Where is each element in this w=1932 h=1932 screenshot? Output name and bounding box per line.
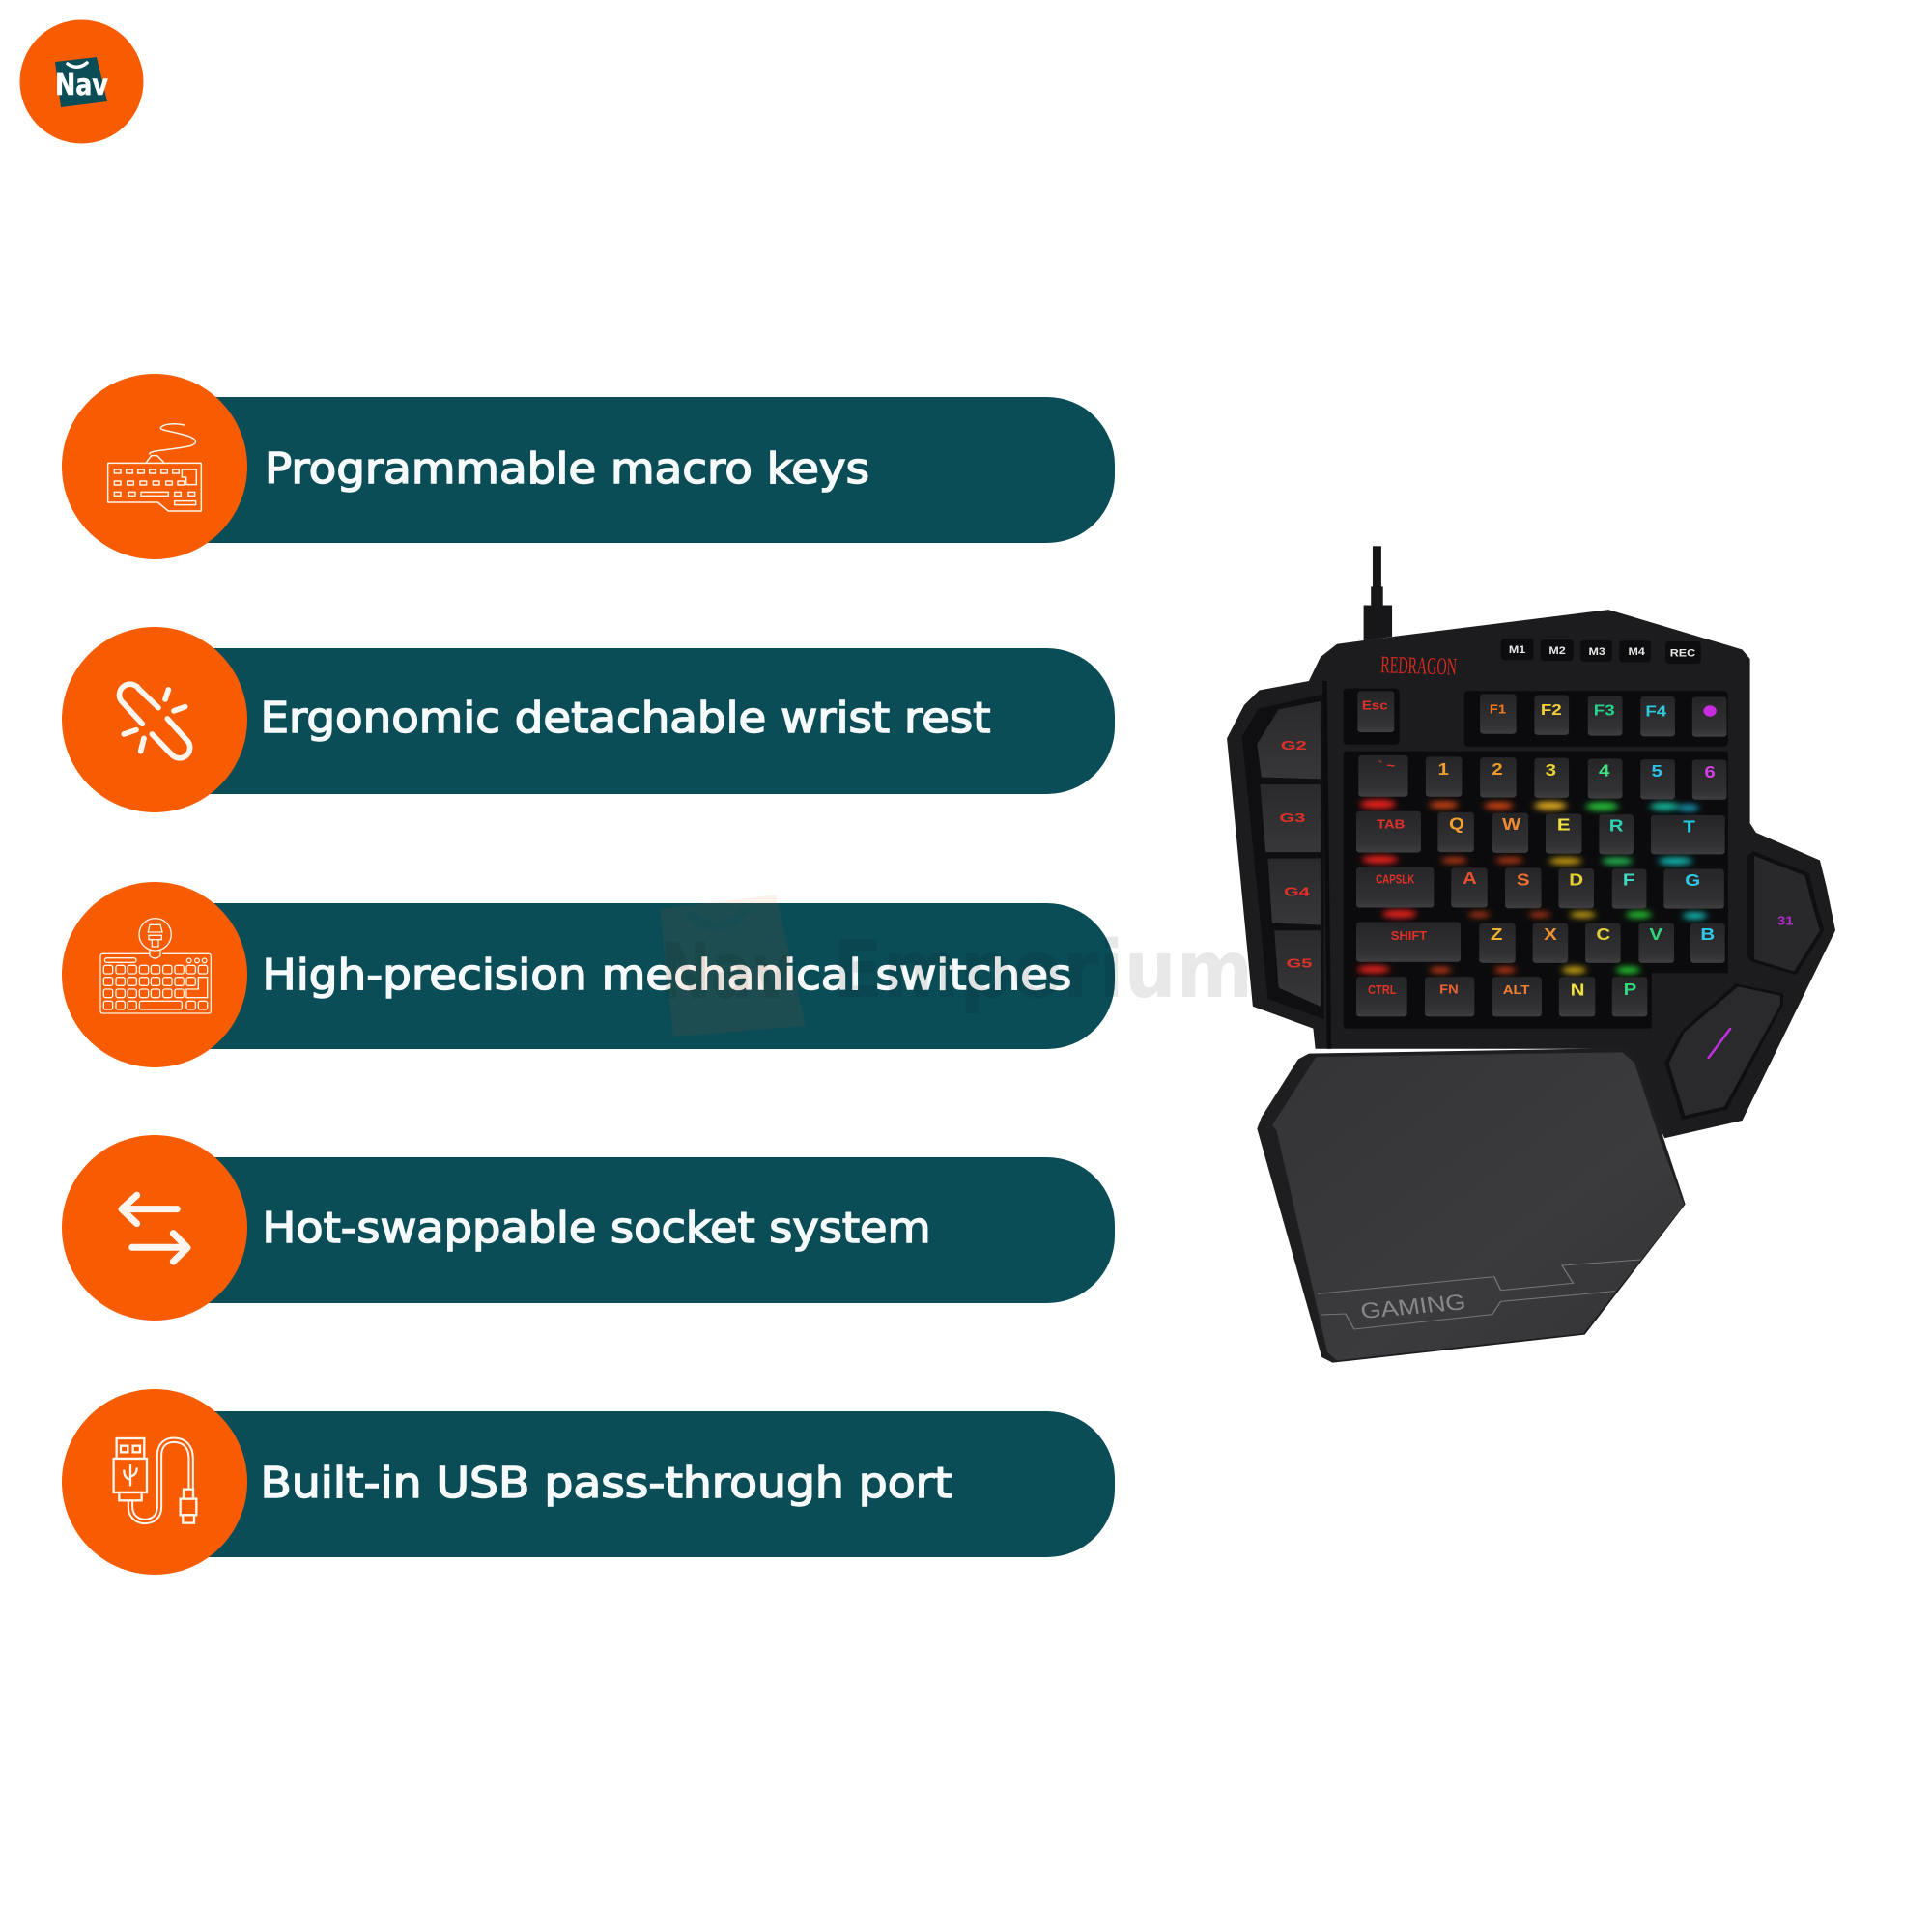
icon: keyboard with cable — [108, 424, 201, 511]
zxcvb key row: B — [1700, 925, 1715, 945]
keyboard body — [1227, 610, 1835, 1138]
qwert key row: Q — [1449, 815, 1464, 834]
function key row — [1357, 691, 1727, 737]
macro record keys: M1 — [1509, 644, 1526, 656]
watermark: Nav — [660, 926, 792, 1016]
number key row: 4 — [1599, 762, 1610, 781]
zxcvb key row: Z — [1491, 925, 1503, 945]
macro record keys: M2 — [1548, 645, 1566, 657]
icon: usb cable — [114, 1438, 196, 1523]
number key row: 2 — [1492, 760, 1503, 780]
icon: detached link — [120, 684, 190, 758]
keyboard upper unit — [1227, 546, 1835, 1138]
zxcvb key row: C — [1596, 925, 1610, 945]
number key row: 5 — [1651, 762, 1662, 781]
zxcvb key row: SHIFT — [1391, 929, 1428, 943]
asdfg key row: CAPSLK — [1376, 872, 1414, 886]
number key row: 6 — [1704, 763, 1716, 781]
macro record keys — [1501, 639, 1701, 664]
qwert key row: TAB — [1377, 818, 1405, 831]
bottom key row: CTRL — [1368, 983, 1397, 997]
feature row 4 — [62, 1135, 1115, 1321]
number key row: 1 — [1437, 760, 1449, 780]
qwert key row — [1356, 811, 1725, 854]
switch wells — [1344, 689, 1728, 1029]
feature row 5 — [62, 1389, 1115, 1575]
wrist rest — [1257, 1048, 1686, 1363]
zxcvb key row: V — [1649, 925, 1662, 945]
thumb keys — [1664, 851, 1824, 1120]
function key row: Esc — [1362, 698, 1388, 712]
asdfg key row — [1356, 867, 1724, 909]
macro side keys: G2 — [1281, 739, 1307, 753]
macro record keys: M3 — [1588, 646, 1605, 658]
label: programmable macro keys: Programmable macro keys — [265, 444, 869, 494]
keyboard upper unit: REDRAGON — [1380, 651, 1458, 680]
asdfg key row: G — [1685, 871, 1700, 891]
feature row 1 — [62, 374, 1115, 559]
bottom key row: ALT — [1503, 983, 1530, 997]
thumb keys: 31 — [1777, 914, 1794, 927]
number key row: ` ~ — [1378, 759, 1395, 773]
macro side keys: G4 — [1284, 886, 1310, 898]
function key row: F1 — [1490, 702, 1506, 716]
label: hot-swappable sockets: Hot-swappable socket system — [263, 1204, 931, 1253]
rgb glow — [1357, 800, 1707, 974]
watermark — [660, 895, 1253, 1037]
watermark: Emporium — [833, 924, 1253, 1016]
asdfg key row: A — [1463, 869, 1477, 889]
icon: keyboard with mechanical switch — [100, 919, 211, 1013]
macro side keys: G5 — [1287, 956, 1313, 970]
label: usb pass-through: Built-in USB pass-through port — [261, 1459, 952, 1508]
bottom key row: P — [1624, 980, 1637, 999]
macro side keys — [1242, 694, 1324, 1019]
qwert key row: E — [1557, 816, 1571, 835]
product image: one-handed keyboard — [1227, 546, 1835, 1363]
asdfg key row: S — [1517, 871, 1530, 890]
icon: swap arrows — [122, 1195, 187, 1262]
qwert key row: W — [1502, 815, 1521, 835]
wrist rest: GAMING — [1359, 1290, 1467, 1323]
zxcvb key row: X — [1544, 925, 1557, 945]
feature row 3 — [62, 882, 1115, 1067]
bottom key row: FN — [1439, 982, 1459, 996]
asdfg key row: D — [1569, 871, 1583, 890]
number key row: 3 — [1546, 761, 1556, 781]
macro side keys: G3 — [1280, 811, 1306, 825]
label: ergonomic wrist rest: Ergonomic detachable wrist rest — [261, 694, 991, 743]
logo badge — [19, 19, 143, 143]
qwert key row: R — [1609, 817, 1624, 836]
bottom key row: N — [1571, 981, 1584, 1000]
qwert key row: T — [1683, 818, 1695, 837]
logo badge: Nav — [55, 69, 108, 102]
function key row: F2 — [1541, 700, 1562, 719]
zxcvb key row — [1356, 922, 1725, 963]
bottom key row — [1356, 977, 1647, 1016]
function key row: F4 — [1645, 702, 1667, 720]
function key row: F3 — [1594, 701, 1615, 719]
number key row — [1358, 755, 1727, 800]
asdfg key row: F — [1623, 871, 1634, 890]
macro record keys: REC — [1670, 647, 1696, 659]
macro record keys: M4 — [1629, 646, 1645, 658]
label: mechanical switches: High-precision mechanical switches — [263, 951, 1072, 1000]
usb cable — [1364, 546, 1392, 640]
feature row 2 — [62, 627, 1115, 812]
